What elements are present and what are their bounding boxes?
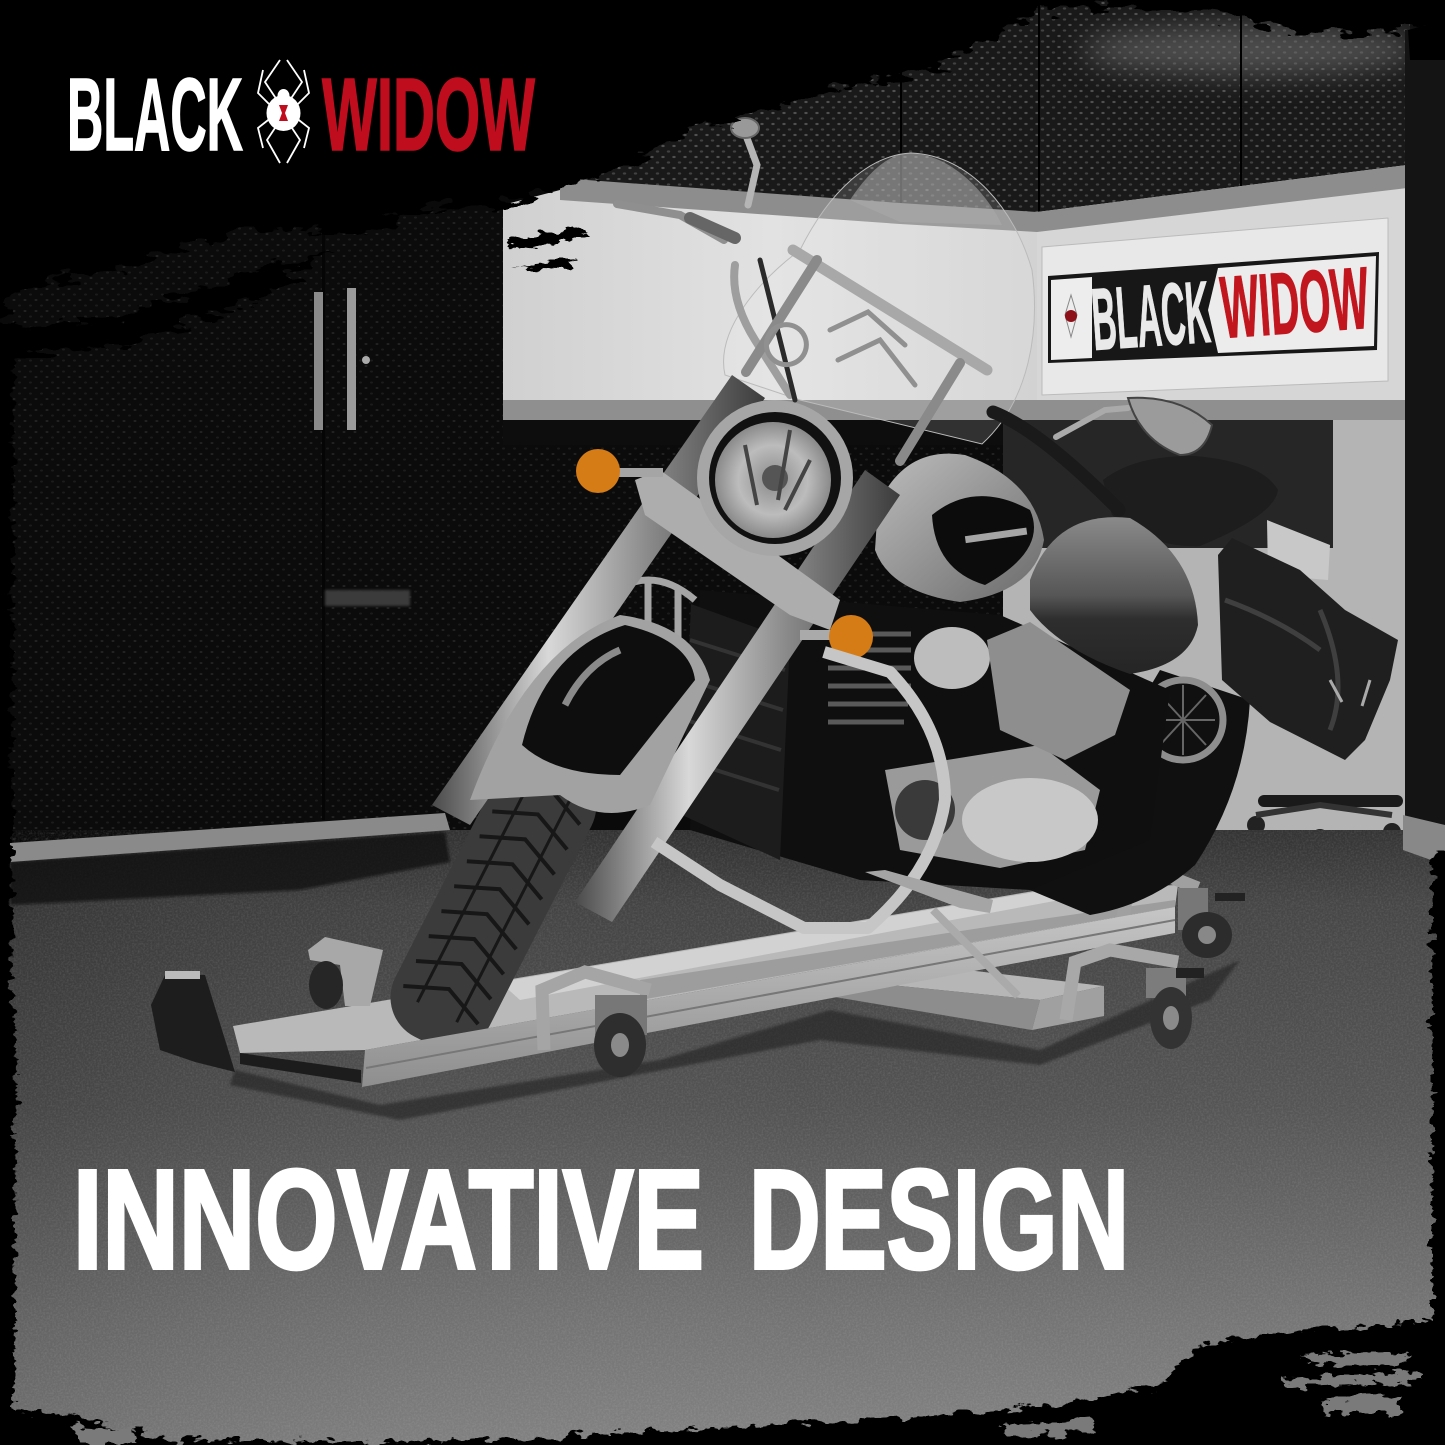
dolly shadow [230,960,1240,1120]
motorcycle [375,118,1398,1065]
crash bar [654,652,945,928]
platform end slot [240,1053,361,1083]
rear wheel [1030,670,1250,915]
front rail [362,907,1175,1087]
passenger seat [1103,456,1278,546]
headlight [697,400,853,556]
left cabinet [10,210,503,850]
wall sign: Black Widow: BLACK [1088,262,1213,369]
windshield [724,153,1034,444]
upper cabinets [560,0,1420,225]
brand logo: BLACK [67,57,243,172]
front caster [542,972,650,1077]
rolling stool [1247,795,1403,847]
title: DESIGN [749,1140,1129,1298]
saddlebags [1218,520,1398,760]
torn black top edge [0,0,1445,365]
logo word: WIDOW: WIDOW [322,57,535,172]
footboard [865,870,993,913]
front fender [470,615,710,813]
forks [432,375,900,922]
far caster [1120,877,1245,958]
kickstand [933,910,1018,996]
white wall panel [503,190,1040,415]
tank cowl [875,454,1044,602]
motorcycle dolly: front rail and casters [151,907,1204,1087]
handlebars, mirrors, windshield brackets [617,118,1212,510]
icon: spider [258,60,309,163]
floor [0,830,1445,1445]
wall sign: Black Widow [1042,218,1388,395]
front tire [375,739,611,1065]
right wall [1003,420,1405,830]
platform deck [233,885,1178,1053]
radiator [625,580,790,860]
motorcycle dolly: platform and cross member [233,877,1245,1083]
wheel chock [151,971,235,1072]
fuel tank [1030,517,1198,674]
right caster [1066,950,1204,1049]
turn signals [576,449,873,659]
cross member [811,961,1104,1030]
engine and frame [690,590,1170,890]
engine fins and covers [828,622,1130,868]
lower center cabinet [503,420,1003,740]
title: INNOVATIVE [73,1140,704,1298]
triple clamp [635,470,840,630]
rear-left caster [308,937,383,1009]
